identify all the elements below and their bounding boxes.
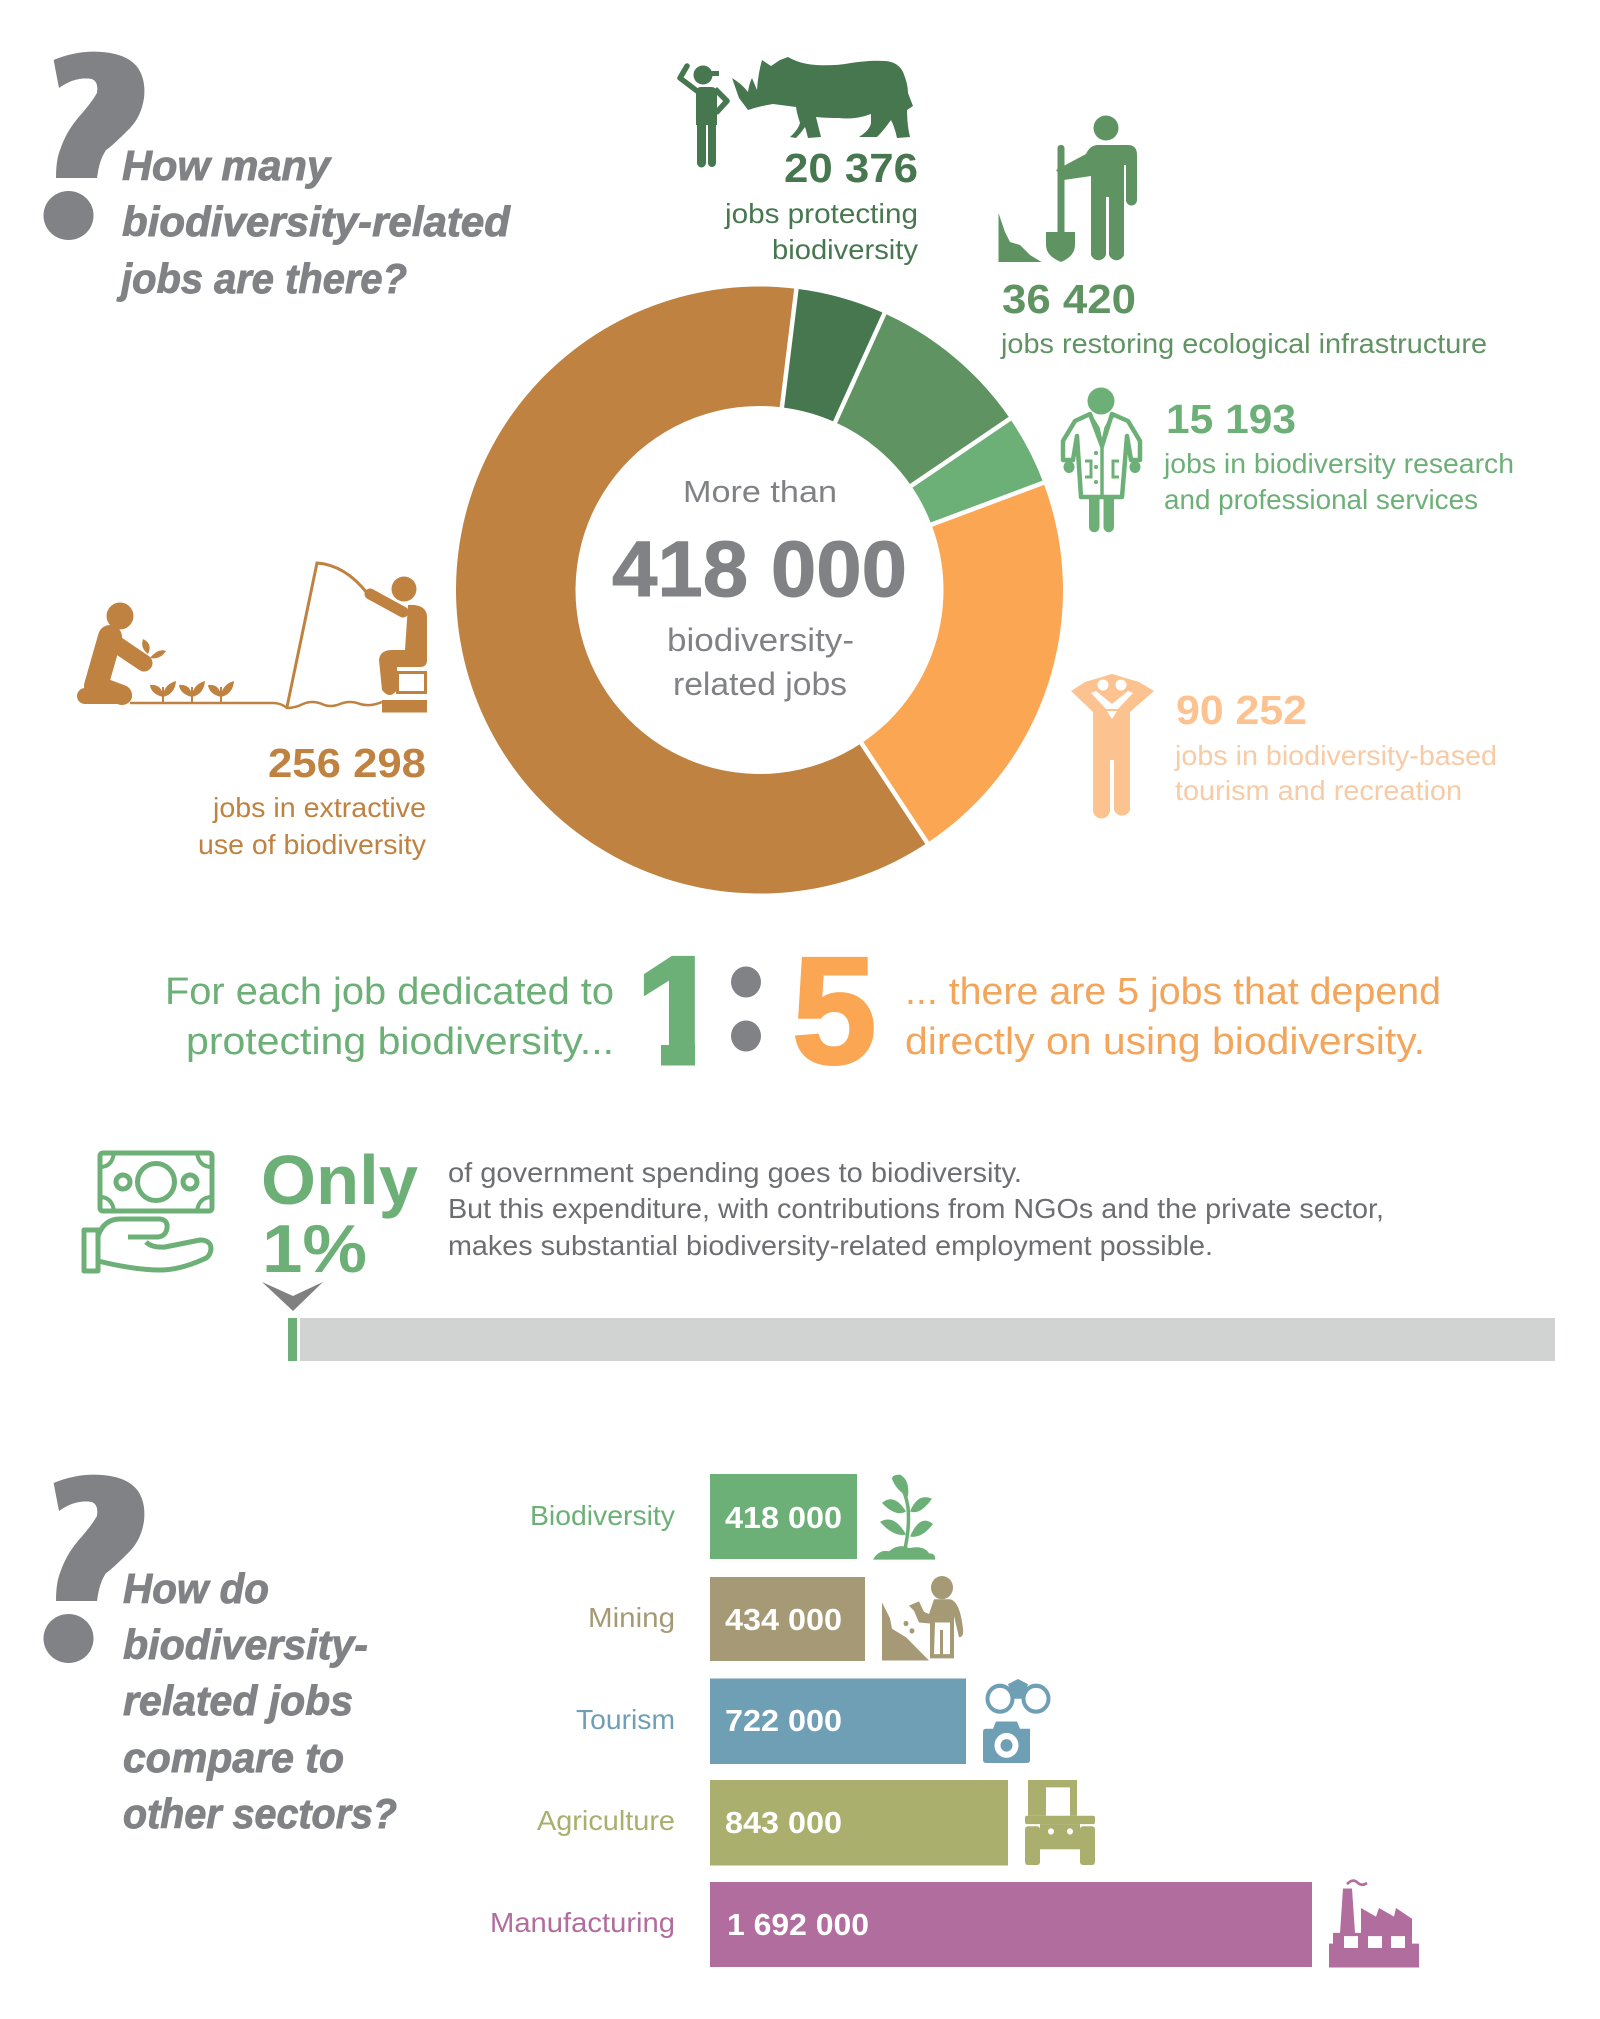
heading: how do jobs compare: related jobs [123,1677,353,1724]
row: tourism [576,1678,1048,1764]
heading: how many biodiversity-related jobs: How many [122,142,333,189]
value and label: 256 298 [198,740,426,860]
heading: how do jobs compare: How do [123,1565,269,1612]
ratio numeral 1: 1 [636,926,721,1096]
value and label: 256 298: use of biodiversity [198,829,426,860]
row: agriculture [537,1780,1095,1866]
ratio colon [731,966,761,1052]
row: mining: 434 000 [725,1602,842,1637]
row: agriculture: 843 000 [725,1805,842,1840]
value and label: 90 252: jobs in biodiversity-based [1174,740,1497,771]
donut centre: total jobs: More than [683,474,837,509]
donut centre: total jobs: 418 000 [612,524,907,613]
category: restoring ecological infrastructure [998,116,1487,359]
text: spending explanation: of government spending goes to biodiversity. [448,1157,1022,1188]
row: biodiversity: Biodiversity [530,1500,675,1531]
arrow pointing to 1 percent [262,1282,323,1311]
heading: how do jobs compare: biodiversity- [123,1621,368,1668]
value and label: 36 420: jobs restoring ecological infrastructure [1000,328,1487,359]
progress bar: 1 percent of spending [288,1318,1555,1361]
row: mining [588,1576,963,1661]
question block: compare to other sectors [44,1446,397,1837]
text: protecting biodiversity: For each job dedicated to [165,971,614,1013]
category: research and professional services [1063,388,1514,532]
heading: how many biodiversity-related jobs: biodiversity-related [122,198,511,245]
row: biodiversity: 418 000 [725,1500,842,1535]
row: manufacturing [490,1881,1419,1967]
icon: hand holding money [84,1153,212,1271]
question block: how many jobs [44,52,512,302]
value and label: 256 298: 256 298 [268,740,426,786]
value and label: 36 420 [1000,276,1487,359]
heading: how do jobs compare: other sectors? [123,1790,397,1837]
value and label: 256 298: jobs in extractive [212,792,426,823]
icon: tractor [1025,1780,1095,1865]
value and label: 20 376: biodiversity [772,234,918,265]
row: tourism: Tourism [576,1704,675,1735]
icon: question mark [44,1474,144,1663]
donut centre: total jobs [612,474,907,702]
donut centre: total jobs: biodiversity- [667,622,854,658]
category: extractive use [85,563,427,860]
text: using biodiversity [905,971,1441,1063]
text: using biodiversity: directly on using biodiversity. [905,1021,1425,1063]
icon: gardener and fisher [85,563,427,712]
icon: tourist with binoculars [1071,674,1154,818]
row: tourism: 722 000 [725,1703,842,1738]
value and label: 36 420: 36 420 [1002,276,1136,322]
value: only 1%: Only [261,1141,418,1219]
value: only 1% [261,1141,418,1287]
text: protecting biodiversity [165,971,614,1063]
value: only 1%: 1% [262,1211,367,1287]
icon: question mark: ? [49,23,136,286]
icon: ranger and rhino [680,57,913,168]
icon: miner [882,1576,963,1660]
value and label: 15 193: 15 193 [1166,396,1296,442]
ratio row: 1 to 5 [168,956,1438,1066]
value and label: 90 252: tourism and recreation [1175,775,1462,806]
row: manufacturing: 1 692 000 [727,1907,869,1942]
icon: scientist in lab coat [1063,388,1140,532]
icon: question mark [44,52,144,240]
text: protecting biodiversity: protecting biodiversity... [186,1021,614,1063]
text: spending explanation [448,1157,1384,1261]
donut centre: total jobs: related jobs [673,666,847,702]
heading: how do jobs compare: compare to [123,1734,344,1781]
icon: worker with shovel [998,116,1137,262]
heading: how many biodiversity-related jobs [116,142,511,302]
row: manufacturing: Manufacturing [490,1907,675,1938]
donut chart: jobs by category [456,284,1063,893]
row: biodiversity [530,1474,935,1560]
icon: factory [1329,1881,1419,1967]
text: using biodiversity: ... there are 5 jobs that depend [905,971,1441,1013]
icon: question mark: ? [49,1446,136,1709]
text: spending explanation: makes substantial biodiversity-related employment possible. [448,1230,1213,1261]
value and label: 15 193: and professional services [1164,484,1478,515]
ratio numeral 5: 5 [792,926,877,1096]
row: agriculture: Agriculture [537,1805,675,1836]
heading: how many biodiversity-related jobs: jobs are there? [116,255,407,302]
value and label: 20 376: 20 376 [784,145,918,191]
value and label: 15 193 [1163,396,1514,515]
heading: how do jobs compare [123,1565,397,1837]
text: spending explanation: But this expenditure, with contributions from NGOs and the private sector, [448,1193,1384,1224]
icon: binoculars and camera [983,1679,1048,1763]
row: mining: Mining [588,1602,675,1633]
value and label: 90 252: 90 252 [1176,687,1307,733]
icon: plant [873,1475,935,1560]
category: protecting biodiversity [680,57,918,265]
category: tourism and recreation [1071,674,1497,818]
government spending panel [84,1141,1555,1361]
value and label: 15 193: jobs in biodiversity research [1163,448,1514,479]
bar chart: jobs by sector [490,1474,1419,1967]
value and label: 20 376: jobs protecting [724,198,918,229]
value and label: 20 376 [724,145,918,265]
value and label: 90 252 [1174,687,1497,806]
